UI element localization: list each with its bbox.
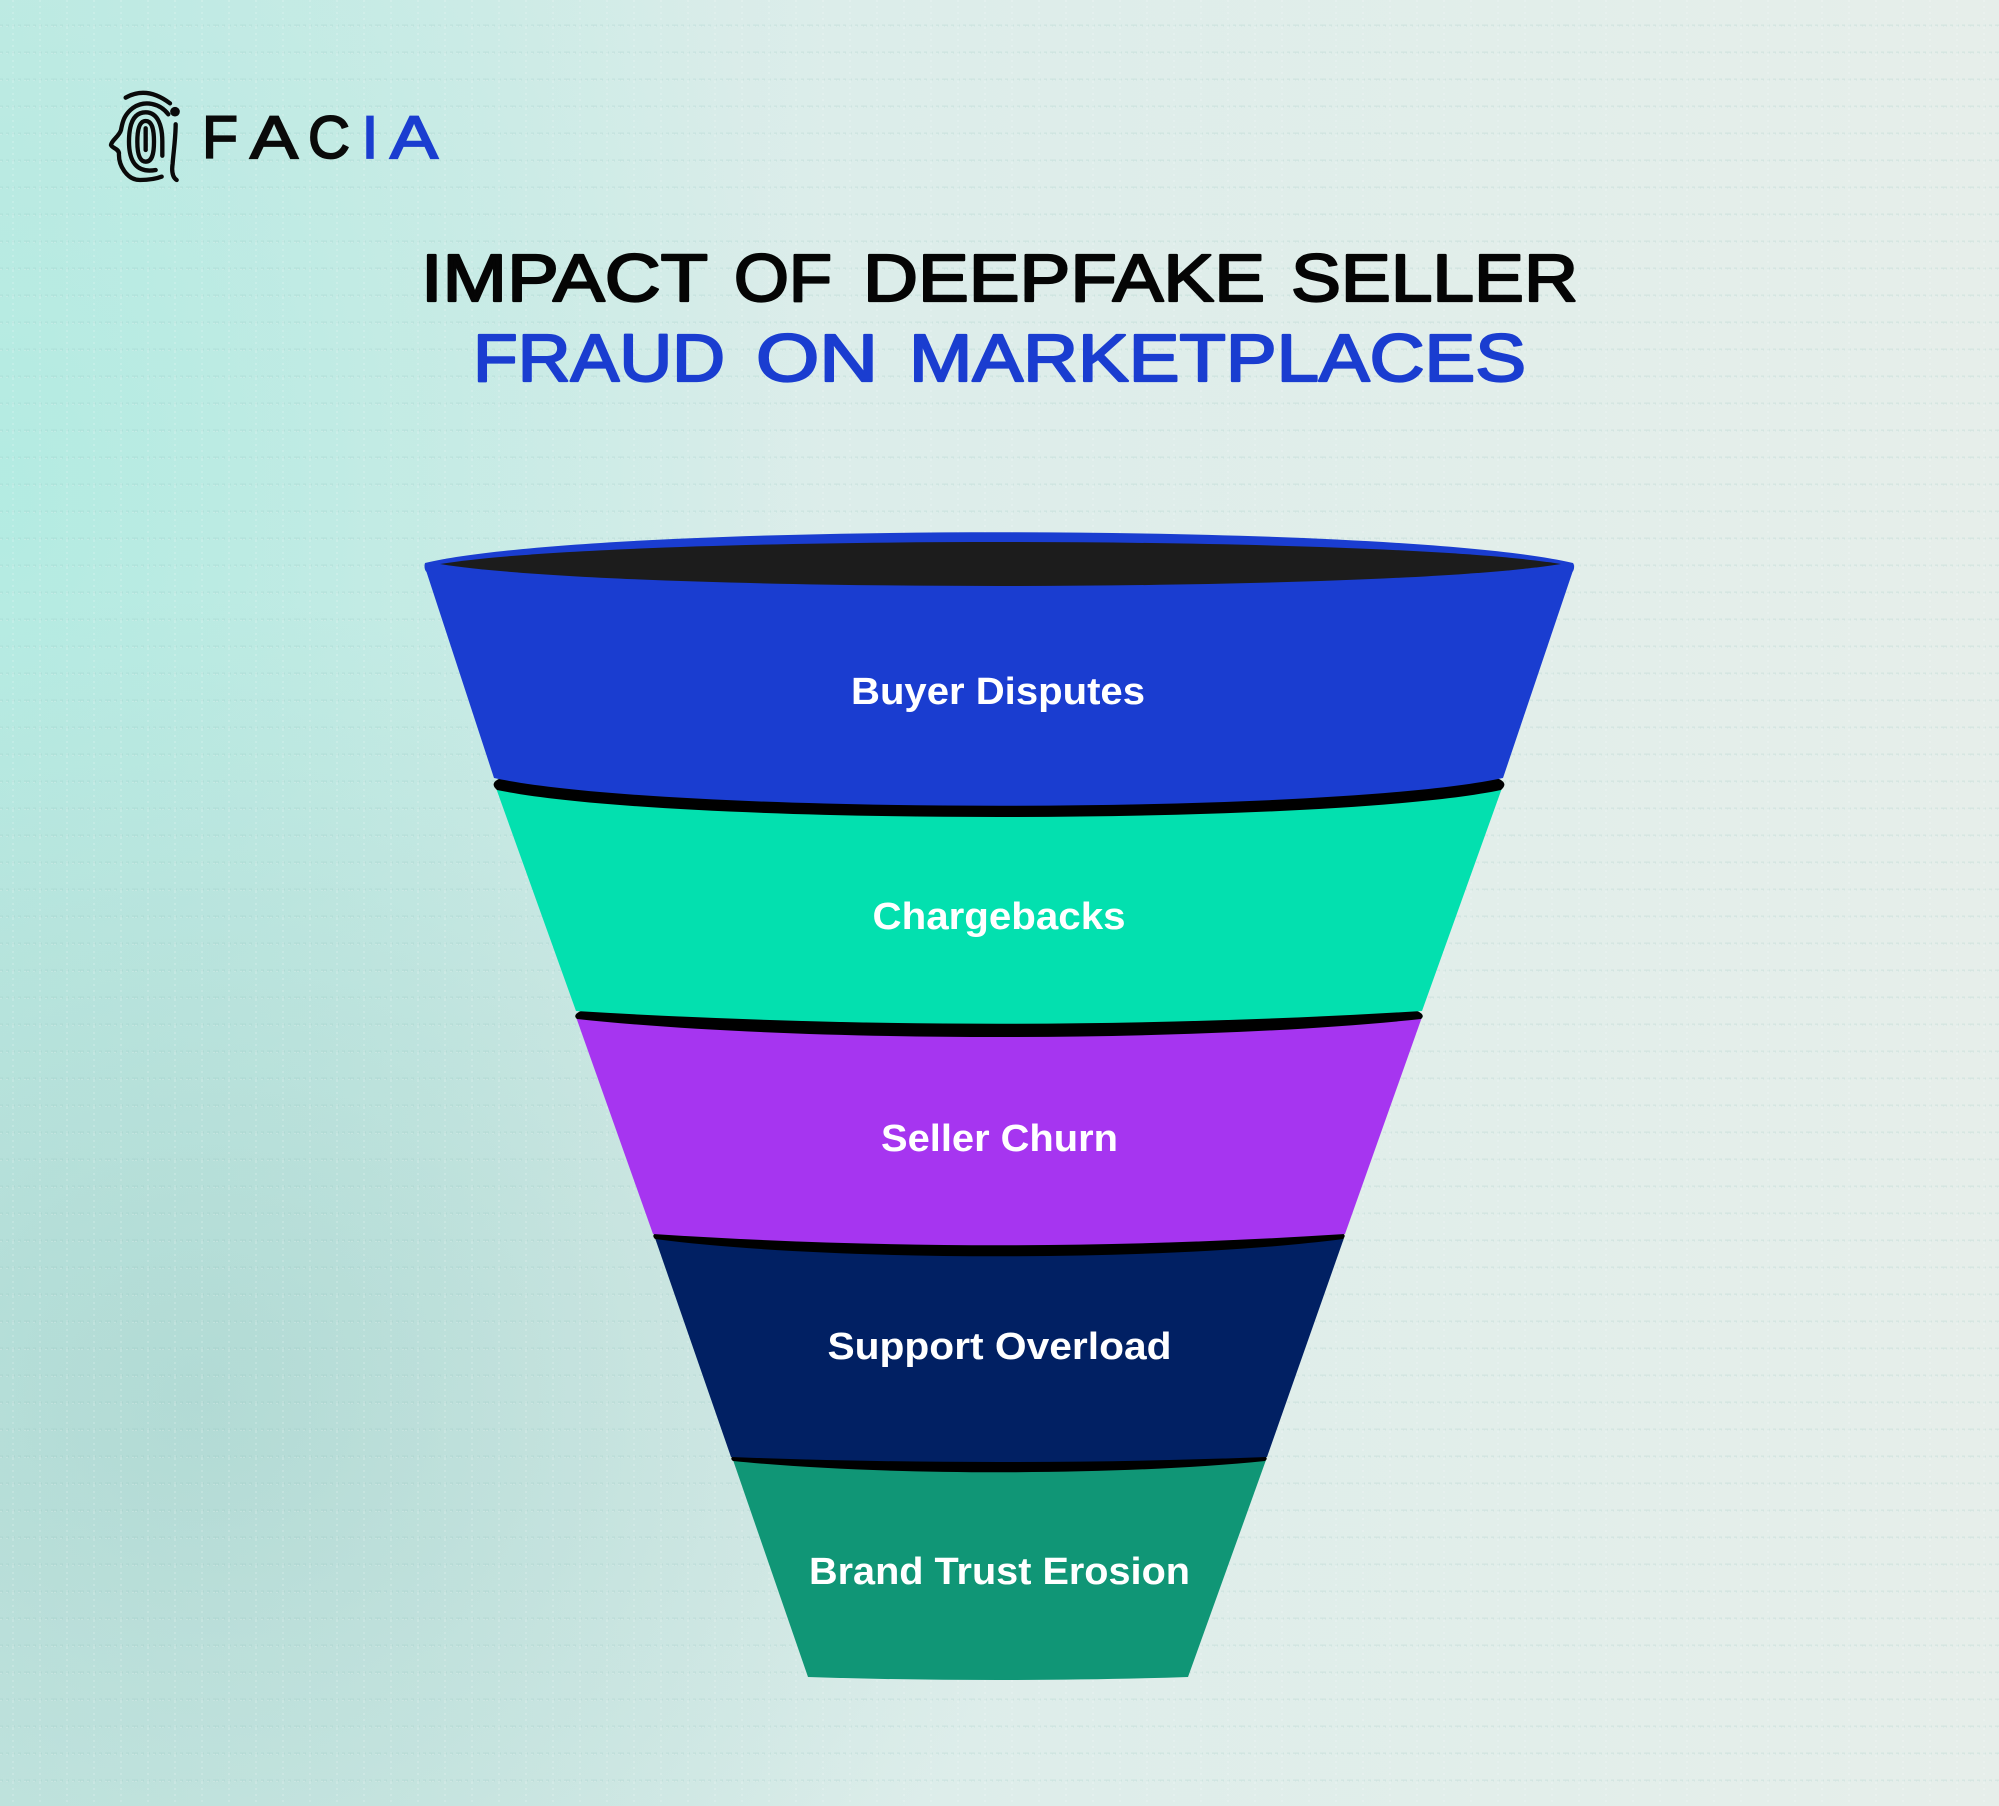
funnel tier 4: Support Overload: [653, 1231, 1345, 1462]
title line 1: [421, 241, 1578, 316]
title line 1: DEEPFAKE: [863, 241, 1265, 316]
funnel tier 3: Seller Churn: [575, 1008, 1423, 1245]
funnel opening: [440, 542, 1561, 586]
logo: FACIA: [111, 93, 438, 180]
wordmark: C: [308, 104, 350, 171]
title line 2: FRAUD: [473, 321, 725, 396]
wordmark: [202, 104, 438, 171]
title line 1: OF: [734, 241, 832, 316]
title line 1: SELLER: [1291, 241, 1578, 316]
funnel tier 2: Chargebacks: [494, 775, 1504, 1024]
funnel tier 1: Buyer Disputes: Buyer Disputes: [851, 671, 1145, 713]
funnel tier 3: Seller Churn: Seller Churn: [881, 1118, 1118, 1160]
title line 2: ON: [756, 321, 878, 396]
funnel chart: [424, 532, 1574, 1680]
funnel tier 5: Brand Trust Erosion: Brand Trust Erosion: [809, 1551, 1190, 1593]
wordmark: I: [362, 104, 378, 171]
wordmark: A: [390, 104, 438, 171]
title line 2: [473, 321, 1526, 396]
wordmark: A: [250, 104, 298, 171]
funnel tier 5: Brand Trust Erosion: [731, 1454, 1267, 1680]
title line 1: IMPACT: [421, 241, 708, 316]
funnel tier 2: Chargebacks: Chargebacks: [872, 896, 1126, 938]
title line 2: MARKETPLACES: [909, 321, 1526, 396]
wordmark: F: [202, 104, 238, 171]
funnel tier 1: Buyer Disputes: [424, 532, 1574, 806]
title: [421, 241, 1578, 396]
funnel tier 4: Support Overload: Support Overload: [828, 1326, 1172, 1368]
icon: fingerprint head: [111, 93, 178, 180]
